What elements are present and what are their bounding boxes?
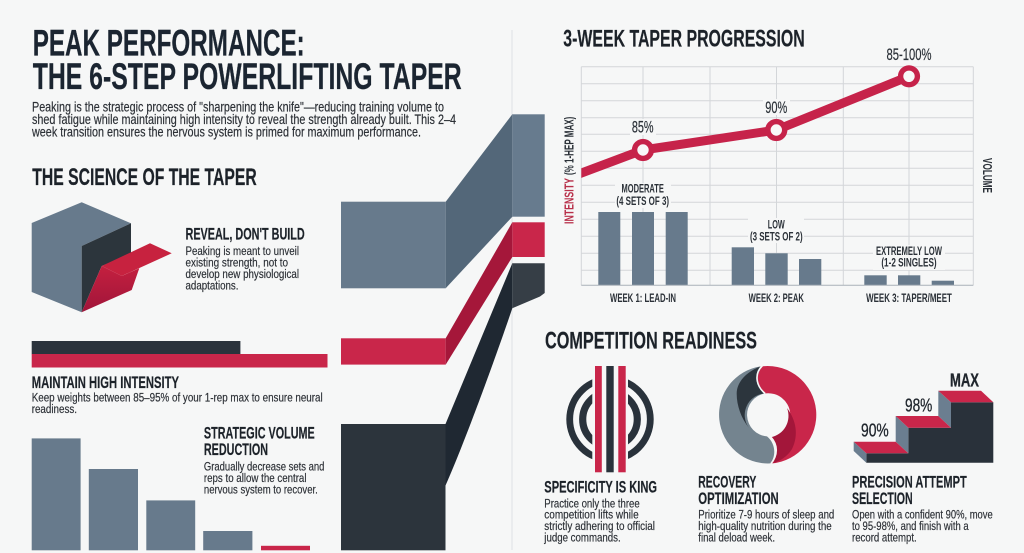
week axis labels [610, 291, 952, 305]
y axis label: intensity: INTENSITY [561, 178, 576, 224]
text block: recovery optimization: final deload week. [698, 530, 775, 544]
intro text: shed fatigue while maintaining high intensity to reveal the strength already built. This 2–4 [32, 112, 456, 127]
icon: recovery cycle [719, 366, 816, 464]
heading: competition readiness: COMPETITION READINESS [545, 327, 757, 354]
intensity labels [630, 46, 932, 137]
volume bars: week 3 [864, 275, 954, 285]
text block: maintain high intensity: readiness. [32, 402, 77, 416]
text block: strategic volume reduction: REDUCTION [204, 440, 268, 459]
text block: recovery optimization [698, 474, 834, 544]
week axis labels: WEEK 2: PEAK [749, 291, 804, 305]
intro text: week transition ensures the nervous system is primed for maximum performance. [31, 125, 421, 140]
text block: strategic volume reduction: STRATEGIC VOLUME [204, 423, 315, 442]
text block: recovery optimization: OPTIMIZATION [698, 490, 779, 508]
text block: precision attempt selection: SELECTION [852, 490, 913, 508]
intensity line [560, 68, 917, 181]
text block: strategic volume reduction: Gradually decrease sets and [204, 459, 324, 473]
icon: intensity bars [32, 341, 327, 368]
text block: recovery optimization: high-quality nutrition during the [698, 519, 832, 533]
y axis label: intensity [561, 117, 576, 224]
volume bars: week 1 [598, 212, 688, 285]
volume labels: (3 SETS OF 2) [750, 229, 803, 243]
week axis labels: WEEK 1: LEAD-IN [610, 291, 676, 305]
text block: reveal, don't build: adaptations. [186, 278, 238, 292]
ribbon: dark [341, 263, 545, 550]
week axis labels: WEEK 3: TAPER/MEET [866, 291, 952, 305]
volume labels: LOW [768, 217, 785, 231]
stair labels: 90% [861, 421, 889, 441]
text block: maintain high intensity: MAINTAIN HIGH INTENSITY [32, 373, 179, 392]
text block: reveal, don't build: develop new physiological [186, 267, 299, 281]
stair labels: MAX [950, 371, 979, 391]
chart: 3-week taper [560, 46, 995, 305]
ribbon: gray [341, 114, 545, 288]
text block: maintain high intensity [32, 373, 323, 416]
text block: strategic volume reduction [204, 423, 324, 496]
text block: reveal, don't build [186, 225, 305, 292]
text block: specificity is king [544, 479, 657, 544]
title: PEAK PERFORMANCE: [33, 23, 305, 64]
title: THE 6-STEP POWERLIFTING TAPER [33, 56, 462, 97]
y axis label: volume: VOLUME [980, 158, 995, 193]
text block: strategic volume reduction: reps to allow the central [204, 471, 306, 485]
text block: recovery optimization: RECOVERY [698, 474, 756, 492]
volume bars: week 2 [732, 247, 821, 285]
text block: specificity is king: competition lifts while [544, 508, 639, 522]
text block: precision attempt selection: to 95-98%, and finish with a [852, 519, 969, 533]
intensity labels: 85-100% [886, 46, 932, 64]
text block: specificity is king: strictly adhering to official [544, 519, 655, 533]
icon: attempt stairs [854, 371, 993, 463]
text block: reveal, don't build: REVEAL, DON'T BUILD [186, 225, 305, 243]
text block: reveal, don't build: existing strength, not to [186, 256, 288, 270]
text block: specificity is king: SPECIFICITY IS KING [544, 479, 657, 497]
text block: precision attempt selection: PRECISION ATTEMPT [852, 474, 967, 492]
icon: cube with red wedge [32, 202, 172, 312]
title [33, 23, 462, 97]
volume labels [615, 182, 945, 270]
text block: precision attempt selection [852, 474, 993, 544]
intro text: Peaking is the strategic process of "sharpening the knife"—reducing training volume to [32, 100, 444, 115]
text block: specificity is king: judge commands. [544, 530, 621, 544]
volume labels: (4 SETS OF 3) [616, 194, 669, 208]
volume labels: (1-2 SINGLES) [881, 256, 937, 270]
intensity labels: 90% [765, 99, 788, 117]
intro text [31, 100, 456, 140]
heading: 3-week taper progression: 3-WEEK TAPER PROGRESSION [563, 26, 805, 53]
y axis label: intensity: (% 1-HEP MAX) [561, 117, 576, 175]
text block: reveal, don't build: Peaking is meant to unveil [186, 244, 299, 258]
volume labels: EXTREMELY LOW [876, 244, 943, 258]
icon: specificity bars and rings [570, 366, 650, 472]
text block: precision attempt selection: record attempt. [852, 530, 917, 544]
text block: maintain high intensity: Keep weights between 85–95% of your 1-rep max to ensure neural [32, 390, 323, 404]
ribbon: red [341, 222, 545, 365]
central ribbon graphic [341, 114, 545, 550]
text block: recovery optimization: Prioritize 7-9 hours of sleep and [698, 508, 834, 522]
heading: the science of the taper: THE SCIENCE OF THE TAPER [32, 164, 257, 191]
intensity labels: 85% [632, 119, 654, 137]
volume labels: MODERATE [622, 182, 664, 196]
stair labels: 98% [905, 396, 932, 416]
text block: specificity is king: Practice only the three [544, 496, 640, 510]
stair labels [861, 371, 979, 441]
text block: strategic volume reduction: nervous system to recover. [204, 482, 318, 496]
bar chart: decreasing volume [32, 438, 310, 550]
